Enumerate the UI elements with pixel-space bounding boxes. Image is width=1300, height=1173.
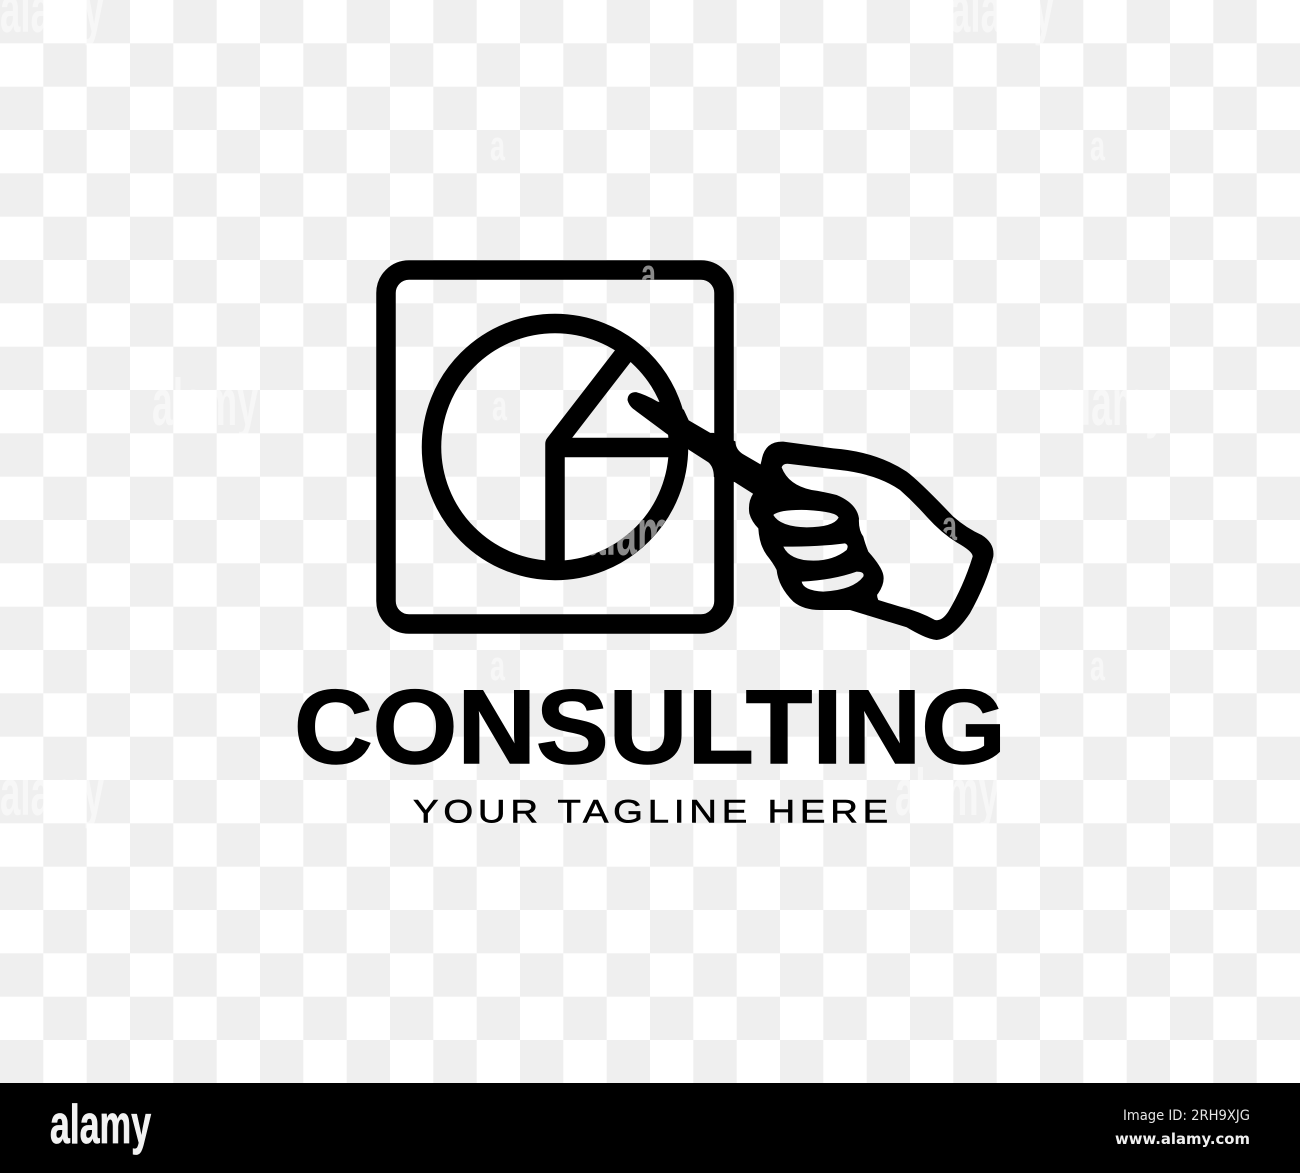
heading: CONSULTING: CONSULTING (294, 669, 1006, 786)
faint watermarks: a (490, 122, 505, 169)
faint watermarks: alamy (152, 365, 258, 439)
faint watermarks: alamy (0, 755, 104, 829)
pie chart circle (432, 324, 678, 570)
faint watermarks: a (1090, 122, 1105, 169)
black footer bar (0, 1083, 1300, 1173)
document frame (386, 270, 724, 624)
faint watermarks: alamy (1060, 365, 1166, 439)
faint watermarks: alamy (895, 755, 999, 829)
hand (749, 442, 993, 640)
gray watermark on ring: alamy (585, 495, 691, 569)
gray watermark letter on hand: a (942, 502, 957, 549)
faint watermarks: a (492, 382, 507, 429)
faint watermarks: a (1090, 642, 1105, 689)
pie chart slices (555, 352, 675, 572)
pencil (628, 393, 763, 493)
gray watermark letter on frame: a (641, 250, 656, 297)
faint watermarks (0, 0, 1166, 829)
image id: Image ID: 2RH9XJG (1123, 1108, 1250, 1124)
alamy logo: alamy (50, 1093, 151, 1155)
tagline: YOUR TAGLINE HERE (413, 794, 893, 830)
faint watermarks: a (490, 642, 505, 689)
website: www.alamy.com (1115, 1130, 1250, 1148)
faint watermarks: a (490, 512, 505, 559)
logo icon: pie chart in frame with hand (386, 250, 993, 640)
